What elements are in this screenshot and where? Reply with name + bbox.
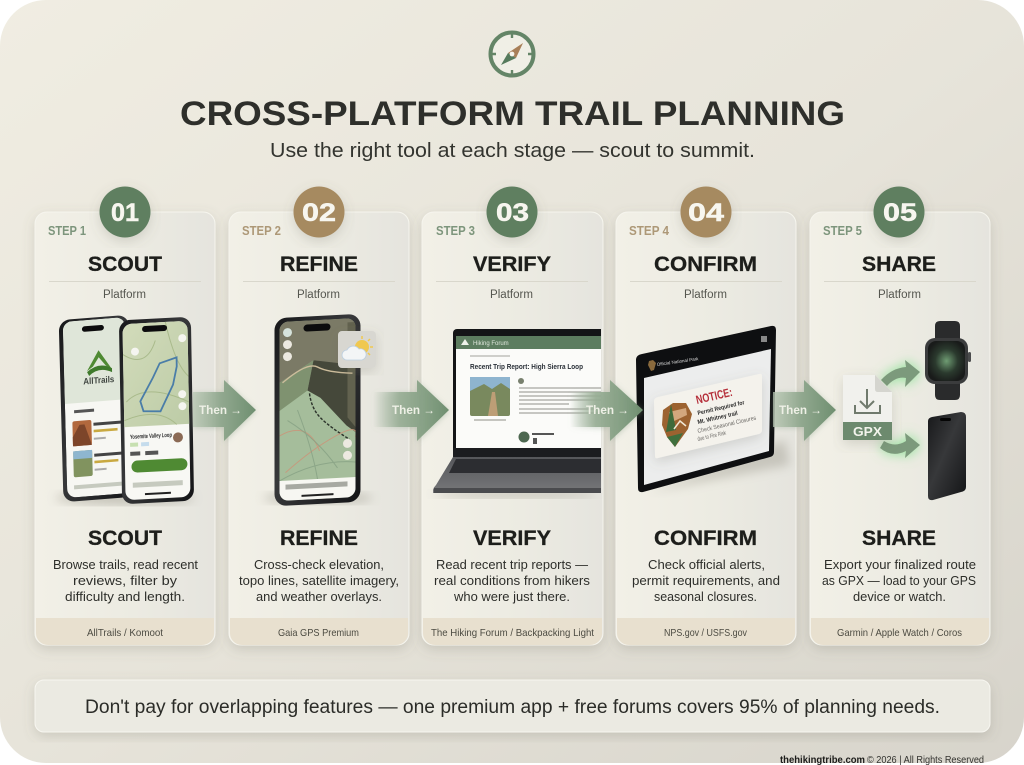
- icon: weather tile: [338, 331, 376, 368]
- description 4: seasonal closures.: [654, 589, 757, 604]
- notice card: [654, 374, 762, 458]
- description 2: topo lines, satellite imagery,: [239, 573, 399, 588]
- arrow: then 2: [373, 380, 449, 441]
- panel: step 3 verify: [422, 212, 603, 645]
- platform footer 1: [36, 618, 214, 645]
- platform label 2: Platform: [297, 289, 340, 301]
- icon: gpx file: [843, 375, 892, 440]
- badge 03: 03: [496, 199, 529, 227]
- icon: compass: [490, 32, 534, 76]
- notice card: Check Seasonal Closures: [697, 416, 757, 435]
- arrow: then 4: Then →: [779, 403, 822, 417]
- platforms 1: AllTrails / Komoot: [87, 627, 163, 639]
- platforms 4: NPS.gov / USFS.gov: [664, 627, 748, 639]
- copyright credit: [780, 755, 984, 765]
- description 1: [53, 557, 198, 604]
- platforms 3: The Hiking Forum / Backpacking Light: [431, 627, 594, 639]
- description 5: Export your finalized route: [824, 557, 976, 572]
- platform footer 4: [617, 618, 795, 645]
- platform footer 2: [230, 618, 408, 645]
- description 3: Read recent trip reports —: [436, 557, 588, 572]
- badge 02: [294, 186, 344, 238]
- logo: allTrails: AllTrails: [83, 374, 114, 386]
- lower heading scout: SCOUT: [88, 526, 162, 550]
- heading share: SHARE: [862, 252, 936, 276]
- badge 05: 05: [883, 199, 917, 227]
- icon: smartwatch: [925, 321, 971, 400]
- description 3: real conditions from hikers: [434, 573, 591, 588]
- heading verify: VERIFY: [473, 252, 551, 276]
- illustration: forum laptop: [433, 329, 613, 498]
- phone: trail map: [119, 317, 194, 504]
- platform label 3: Platform: [490, 289, 533, 301]
- illustration: allTrails phones: [55, 315, 195, 505]
- phone: allTrails list: [59, 315, 133, 502]
- lower heading confirm: CONFIRM: [654, 526, 757, 550]
- step label 1: STEP 1: [48, 224, 86, 238]
- platforms 5: Garmin / Apple Watch / Coros: [837, 627, 962, 639]
- description 5: [822, 557, 976, 604]
- badge 01: 01: [111, 199, 139, 227]
- notice card: Permit Required for: [697, 400, 746, 417]
- title: CROSS-PLATFORM TRAIL PLANNING: [180, 95, 845, 133]
- description 1: difficulty and length.: [65, 589, 185, 604]
- step label 3: STEP 3: [436, 224, 475, 238]
- illustration: gpx export: [843, 321, 971, 500]
- platform label 5: Platform: [878, 289, 921, 301]
- description 4: [632, 557, 780, 604]
- arrow: then 1: Then →: [199, 403, 242, 417]
- illustration: forum laptop: Hiking Forum: [473, 341, 509, 347]
- description 1: Browse trails, read recent: [53, 557, 198, 572]
- badge 02: 02: [302, 199, 336, 227]
- phone: trail map: Yosemite Valley Loop: [130, 433, 172, 441]
- lower heading share: SHARE: [862, 526, 936, 550]
- description 2: and weather overlays.: [256, 589, 382, 604]
- notice card: Mt. Whitney trail: [697, 411, 739, 426]
- heading confirm: CONFIRM: [654, 252, 757, 276]
- description 4: Check official alerts,: [648, 557, 765, 572]
- badge 01: [100, 186, 150, 238]
- icon: gpx file: GPX: [853, 424, 882, 439]
- callout: takeaway bar: Don't pay for overlapping features — one premium app + free forums covers 95% of planning needs.: [85, 697, 940, 718]
- badge 04: [680, 186, 732, 238]
- badge 04: 04: [688, 199, 724, 227]
- heading refine: REFINE: [280, 252, 358, 276]
- heading scout: SCOUT: [88, 252, 162, 276]
- description 2: [239, 557, 399, 604]
- description 4: permit requirements, and: [632, 573, 780, 588]
- panel: step 5 share: [810, 212, 990, 645]
- platforms 2: Gaia GPS Premium: [278, 627, 359, 639]
- description 1: reviews, filter by: [73, 573, 178, 588]
- step label 4: STEP 4: [629, 224, 669, 238]
- platform label 1: Platform: [103, 289, 146, 301]
- panel: step 4 confirm: [616, 212, 796, 645]
- arrow: gpx to watch: [881, 360, 920, 387]
- notice card: due to Fire Risk: [697, 430, 727, 443]
- icon: black smartphone: [928, 412, 966, 500]
- description 3: [434, 557, 591, 604]
- description 3: who were just there.: [453, 589, 570, 604]
- arrow: then 2: Then →: [392, 403, 435, 417]
- description 5: as GPX — load to your GPS: [822, 573, 976, 588]
- description 5: device or watch.: [853, 589, 946, 604]
- illustration: official notice tablet: [636, 326, 790, 492]
- notice card: NOTICE:: [695, 385, 734, 407]
- badge 05: [874, 186, 924, 238]
- step label 2: STEP 2: [242, 224, 281, 238]
- callout: takeaway bar: [35, 680, 990, 732]
- arrow: then 3: Then →: [586, 403, 629, 417]
- panel: step 2 refine: [229, 212, 409, 645]
- panel: step 1 scout: [35, 212, 215, 645]
- illustration: forum laptop: Recent Trip Report: High Sierra Loop: [470, 362, 583, 371]
- subtitle: Use the right tool at each stage — scout to summit.: [270, 140, 755, 162]
- description 2: Cross-check elevation,: [254, 557, 384, 572]
- badge 03: [486, 186, 538, 238]
- icon: park service arrowhead: [662, 403, 692, 447]
- lower heading verify: VERIFY: [473, 526, 551, 550]
- illustration: official notice tablet: Official National Park: [656, 356, 699, 367]
- phone: satellite map: [274, 314, 360, 506]
- platform footer 3: [423, 618, 602, 645]
- illustration: topo satellite phone: [263, 314, 376, 506]
- trail route: [140, 357, 178, 412]
- logo: allTrails: [84, 350, 114, 384]
- platform label 4: Platform: [684, 289, 727, 301]
- step label 5: STEP 5: [823, 224, 862, 238]
- platform footer 5: [811, 618, 989, 645]
- arrow: gpx to phone: [880, 433, 920, 458]
- lower heading refine: REFINE: [280, 526, 358, 550]
- arrow: then 3: [570, 380, 643, 441]
- arrow: then 4: [773, 380, 836, 441]
- arrow: then 1: [193, 380, 256, 441]
